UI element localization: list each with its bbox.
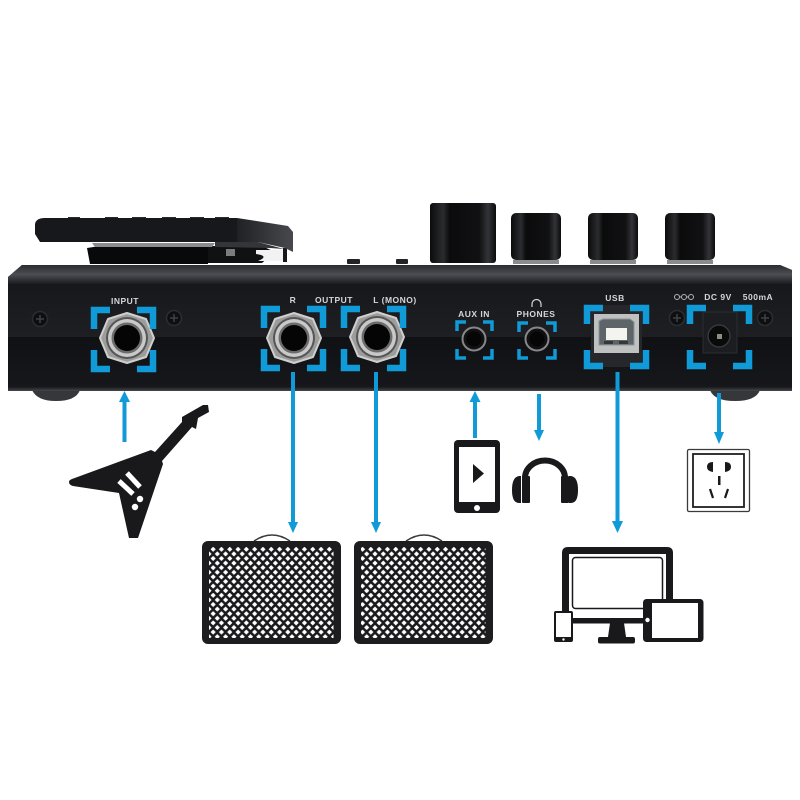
panel labels: R (290, 295, 296, 305)
jack: output L mono (350, 312, 404, 362)
arrow: usb to computer (612, 372, 623, 533)
rear footswitch pedal (35, 217, 293, 264)
panel labels: USB (605, 293, 625, 303)
panel labels: PHONES (517, 309, 555, 319)
port: dc power (703, 312, 737, 353)
panel labels: AUX IN (458, 309, 490, 319)
arrow: phones to headphones (534, 394, 544, 441)
icon: left speaker cabinet (202, 535, 341, 644)
jack: input (100, 313, 154, 363)
arrow: phone to aux in (470, 391, 480, 438)
icon: wall power socket (688, 450, 750, 512)
panel labels: DC 9V (704, 292, 732, 302)
arrow: power to socket (714, 393, 724, 444)
arrow: output L to amp (371, 372, 381, 533)
panel labels: L (MONO) (373, 295, 417, 305)
jack: aux in (462, 328, 486, 350)
panel labels (111, 292, 773, 319)
arrow: guitar to input (119, 391, 130, 442)
panel labels: OUTPUT (315, 295, 353, 305)
monitor (562, 547, 673, 644)
port: usb (591, 305, 642, 367)
icon: right speaker cabinet (354, 535, 493, 644)
icon: flying v guitar (69, 405, 209, 538)
tablet (643, 599, 704, 642)
icon: smartphone with play button (454, 440, 500, 513)
panel labels: INPUT (111, 296, 139, 306)
panel labels: 500mA (743, 292, 773, 302)
icon: headphones (512, 460, 578, 503)
jack: output R (267, 313, 321, 363)
jack: phones (526, 328, 548, 350)
rubber feet (32, 390, 760, 401)
small phone (554, 611, 573, 642)
control knobs (430, 203, 715, 264)
blue port brackets (94, 308, 749, 369)
icon: computer, tablet and phone (554, 547, 704, 644)
device rear panel (8, 259, 792, 391)
arrow: output R to amp (288, 372, 298, 533)
panel screws (32, 310, 772, 326)
